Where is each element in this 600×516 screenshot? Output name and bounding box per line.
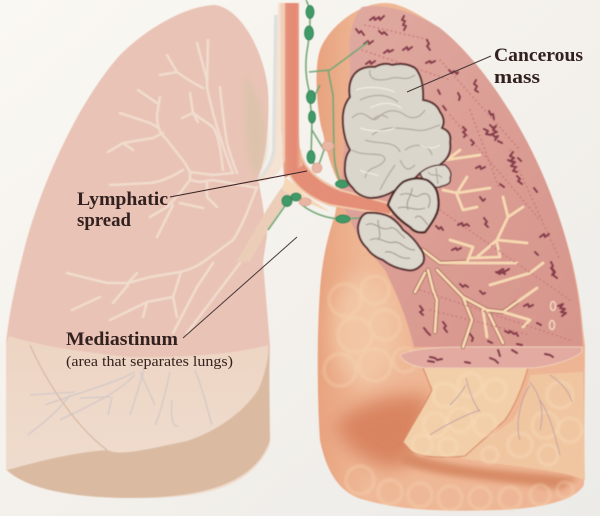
right lung under-lobe shade (400, 450, 578, 490)
right lower posterior lobe (460, 372, 585, 480)
lower mass (358, 213, 424, 270)
left lung inner lower fold (7, 345, 270, 498)
left lower lobe (6, 336, 270, 498)
right main bronchus (283, 150, 395, 215)
pink section dark specks (356, 16, 566, 363)
left main bronchus (236, 180, 295, 262)
pink section band (400, 347, 582, 368)
left lower veins (28, 365, 212, 435)
pink section pale specks (362, 25, 570, 340)
right lung lobule pattern (324, 276, 573, 510)
lower lobule lines (412, 373, 582, 465)
left bronchial tree (67, 40, 257, 333)
left lung rim near trachea (259, 15, 276, 180)
trachea and bronchi (236, 3, 395, 262)
right lung pink cut section (340, 6, 583, 347)
label: lymphatic: Lymphatic (77, 189, 168, 210)
left lung tan shade (244, 75, 266, 176)
small mass (420, 165, 451, 187)
label: mediastinum: Mediastinum (66, 329, 178, 350)
leader line: lymphatic spread (170, 171, 307, 197)
trachea side (258, 3, 285, 182)
label: mass: mass (494, 68, 540, 88)
right lower wedge lobe (403, 368, 528, 457)
left lung (6, 5, 276, 498)
left lung upper lobes (6, 5, 270, 498)
left fissure line (30, 345, 107, 450)
right lung body (317, 3, 585, 511)
leader line: cancerous mass (407, 56, 491, 92)
right lung pale centre (333, 275, 397, 385)
right lower veins (430, 375, 572, 455)
right lung (317, 3, 585, 511)
carina (282, 178, 330, 212)
label: mediastinum description: (area that separates lungs) (66, 354, 233, 370)
leader line: mediastinum (183, 237, 297, 338)
right bronchial tree (415, 150, 543, 347)
lymph vessels (268, 0, 368, 230)
lymph vessels and nodes (268, 0, 368, 230)
upper mass (343, 64, 450, 198)
trachea (280, 3, 303, 178)
middle mass (388, 178, 439, 232)
green nodes (282, 6, 350, 223)
pink nodes (299, 141, 334, 206)
pale spots (550, 302, 556, 330)
right lung dark band (335, 394, 430, 468)
label: spread: spread (77, 210, 131, 231)
cancerous masses (343, 64, 451, 270)
label: cancerous: Cancerous (494, 46, 583, 66)
